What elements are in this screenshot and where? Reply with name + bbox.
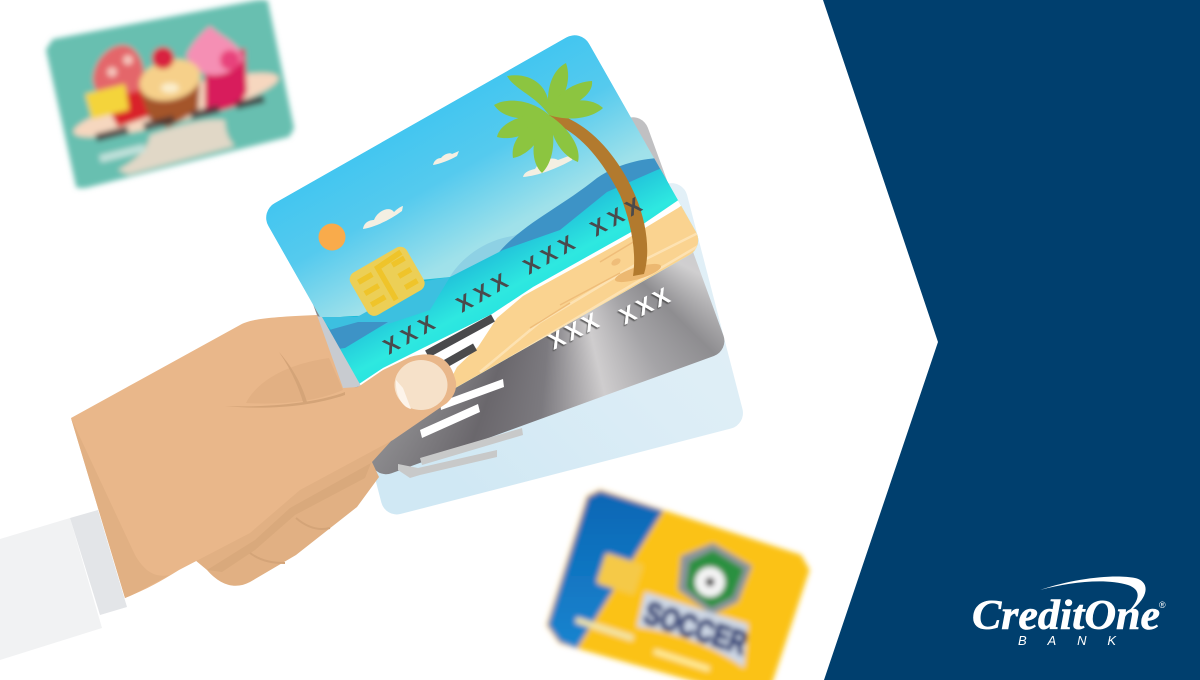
surf (360, 200, 698, 388)
black stripes (427, 318, 493, 354)
card number: XXX (379, 307, 444, 359)
thumb nail (394, 360, 448, 410)
sky (266, 35, 674, 317)
hand (71, 315, 456, 598)
sand (454, 206, 698, 388)
wrist shading (71, 418, 170, 598)
nail highlight (396, 380, 411, 409)
metal card number (544, 281, 677, 354)
grey stripes on pale card (398, 428, 523, 478)
metal surface (313, 117, 724, 474)
navy chevron panel (823, 0, 1200, 680)
metal card number: XXX (544, 306, 606, 354)
metal card number: XXX (615, 281, 677, 329)
brushed metal card (313, 117, 724, 474)
pale translucent card (322, 180, 746, 518)
palm and thumb (71, 315, 456, 598)
blurred soccer card: SOCCER (640, 594, 752, 661)
card number: XXX (519, 227, 584, 279)
palm fronds (494, 63, 603, 173)
dark blue hill (499, 158, 670, 252)
pale distant hill (450, 234, 518, 277)
Credit One Bank logo (972, 576, 1166, 648)
blurred soccer card (548, 491, 808, 680)
shirt sleeve (0, 518, 102, 660)
logo swoosh (1040, 576, 1146, 613)
near dark blue hill (330, 322, 388, 349)
logo wordmark: CreditOne (972, 593, 1160, 639)
finger creases (250, 518, 330, 563)
blurred cupcake card (48, 2, 292, 186)
knuckle crease (225, 352, 345, 408)
card number: XXX (452, 265, 517, 317)
registered mark: ® (1159, 600, 1166, 610)
card number: XXX (586, 189, 651, 241)
shirt cuff (70, 510, 127, 615)
metal card white stripes (420, 379, 504, 438)
card number (382, 196, 644, 355)
sun (318, 224, 346, 250)
trunk shadow on sand (615, 264, 661, 282)
beach card (266, 35, 698, 388)
clouds (363, 151, 572, 229)
lower fingers (195, 440, 392, 586)
sea (326, 168, 698, 388)
sea upper left band (322, 277, 450, 330)
knuckle shading (246, 358, 343, 404)
finger fold shading (207, 463, 371, 572)
logo bank line: BANK (1018, 633, 1117, 648)
grey card edge by palm (316, 316, 361, 390)
palm trunk (549, 112, 647, 276)
chip (350, 246, 425, 316)
